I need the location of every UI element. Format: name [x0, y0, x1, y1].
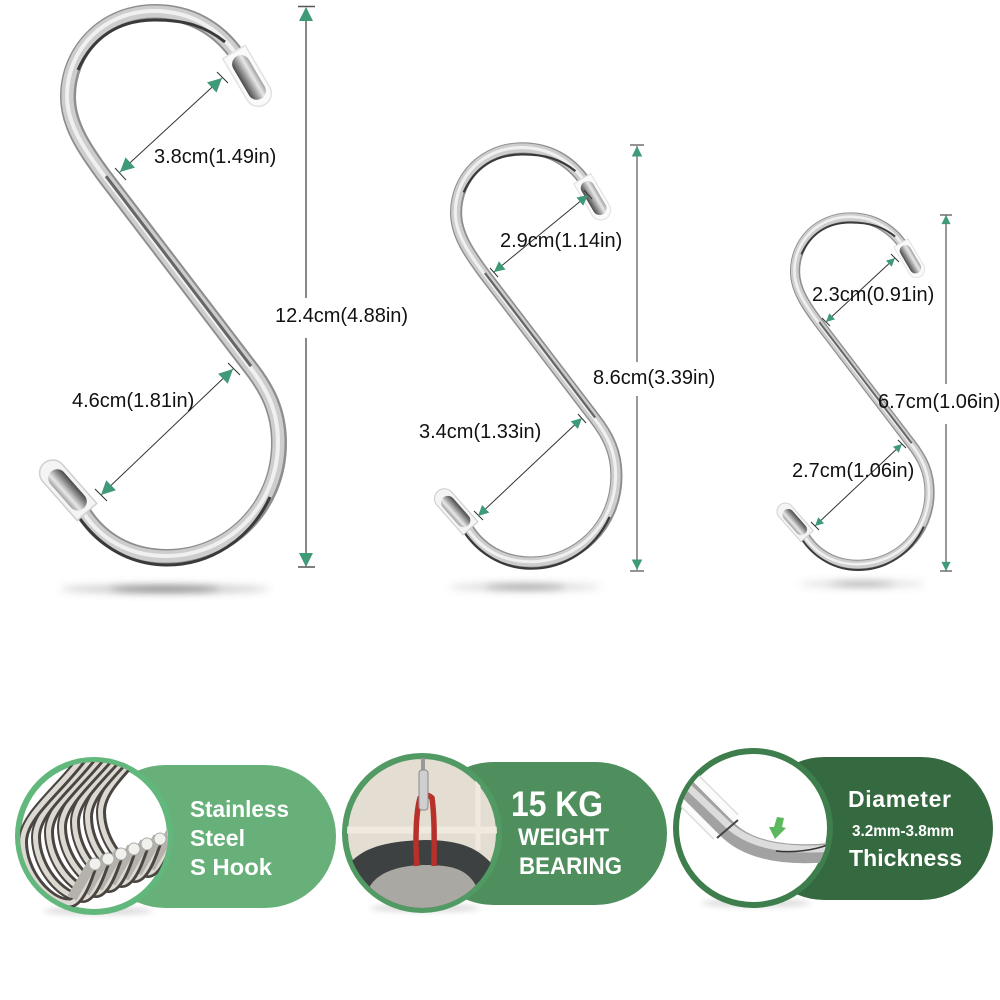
- circle shadow: [43, 907, 153, 915]
- label: Thickness: [849, 845, 962, 871]
- pill background: [94, 765, 336, 908]
- label upper opening: 3.8cm(1.49in): [154, 146, 276, 168]
- label upper opening: 2.3cm(0.91in): [812, 284, 934, 306]
- medium hook shadow: [449, 584, 601, 590]
- pill background: [422, 762, 667, 905]
- small S hook: [774, 217, 930, 570]
- icon: green arrow: [769, 817, 786, 839]
- label: S Hook: [190, 854, 273, 880]
- lower opening arrow: [811, 440, 906, 530]
- label: [190, 796, 289, 880]
- label: BEARING: [519, 853, 622, 880]
- photo circle: pan on hook: [340, 750, 505, 920]
- height arrow: [298, 6, 315, 567]
- photo circle: tube close-up: [675, 751, 835, 905]
- label height: 6.7cm(1.06in): [878, 391, 1000, 413]
- upper opening arrow: [115, 72, 228, 180]
- lower opening arrow: [474, 414, 586, 520]
- label upper opening: 2.9cm(1.14in): [500, 230, 622, 252]
- label: 3.2mm-3.8mm: [852, 823, 954, 840]
- upper opening arrow: [822, 254, 899, 326]
- label lower opening: 3.4cm(1.33in): [419, 421, 541, 443]
- large S hook: [34, 11, 279, 565]
- circle shadow: [701, 899, 811, 907]
- small hook shadow: [800, 582, 924, 586]
- pill background: [753, 757, 993, 900]
- circle shadow: [370, 904, 480, 912]
- photo circle: bundle of hooks: [15, 757, 168, 915]
- medium S hook: [430, 148, 616, 569]
- upper opening arrow: [490, 190, 592, 277]
- label: Diameter: [848, 786, 951, 812]
- small hook dimensions: [792, 215, 1000, 571]
- label height: 12.4cm(4.88in): [275, 305, 408, 327]
- label: 15 KG: [511, 785, 603, 824]
- label: Steel: [190, 825, 245, 851]
- panel: stainless steel: [15, 757, 336, 917]
- height arrow: [940, 215, 952, 571]
- label lower opening: 2.7cm(1.06in): [792, 460, 914, 482]
- label lower opening: 4.6cm(1.81in): [72, 390, 194, 412]
- medium hook dimensions: [419, 145, 715, 571]
- label height: 8.6cm(3.39in): [593, 367, 715, 389]
- panel: weight bearing: [340, 750, 667, 920]
- label: [511, 785, 622, 880]
- lower opening arrow: [95, 363, 240, 501]
- large hook shadow: [60, 585, 270, 593]
- large hook dimensions: [72, 6, 408, 567]
- label: [848, 786, 962, 871]
- label: WEIGHT: [518, 824, 609, 851]
- label: Stainless: [190, 796, 289, 822]
- height arrow: [630, 145, 644, 571]
- panel: diameter: [675, 751, 993, 907]
